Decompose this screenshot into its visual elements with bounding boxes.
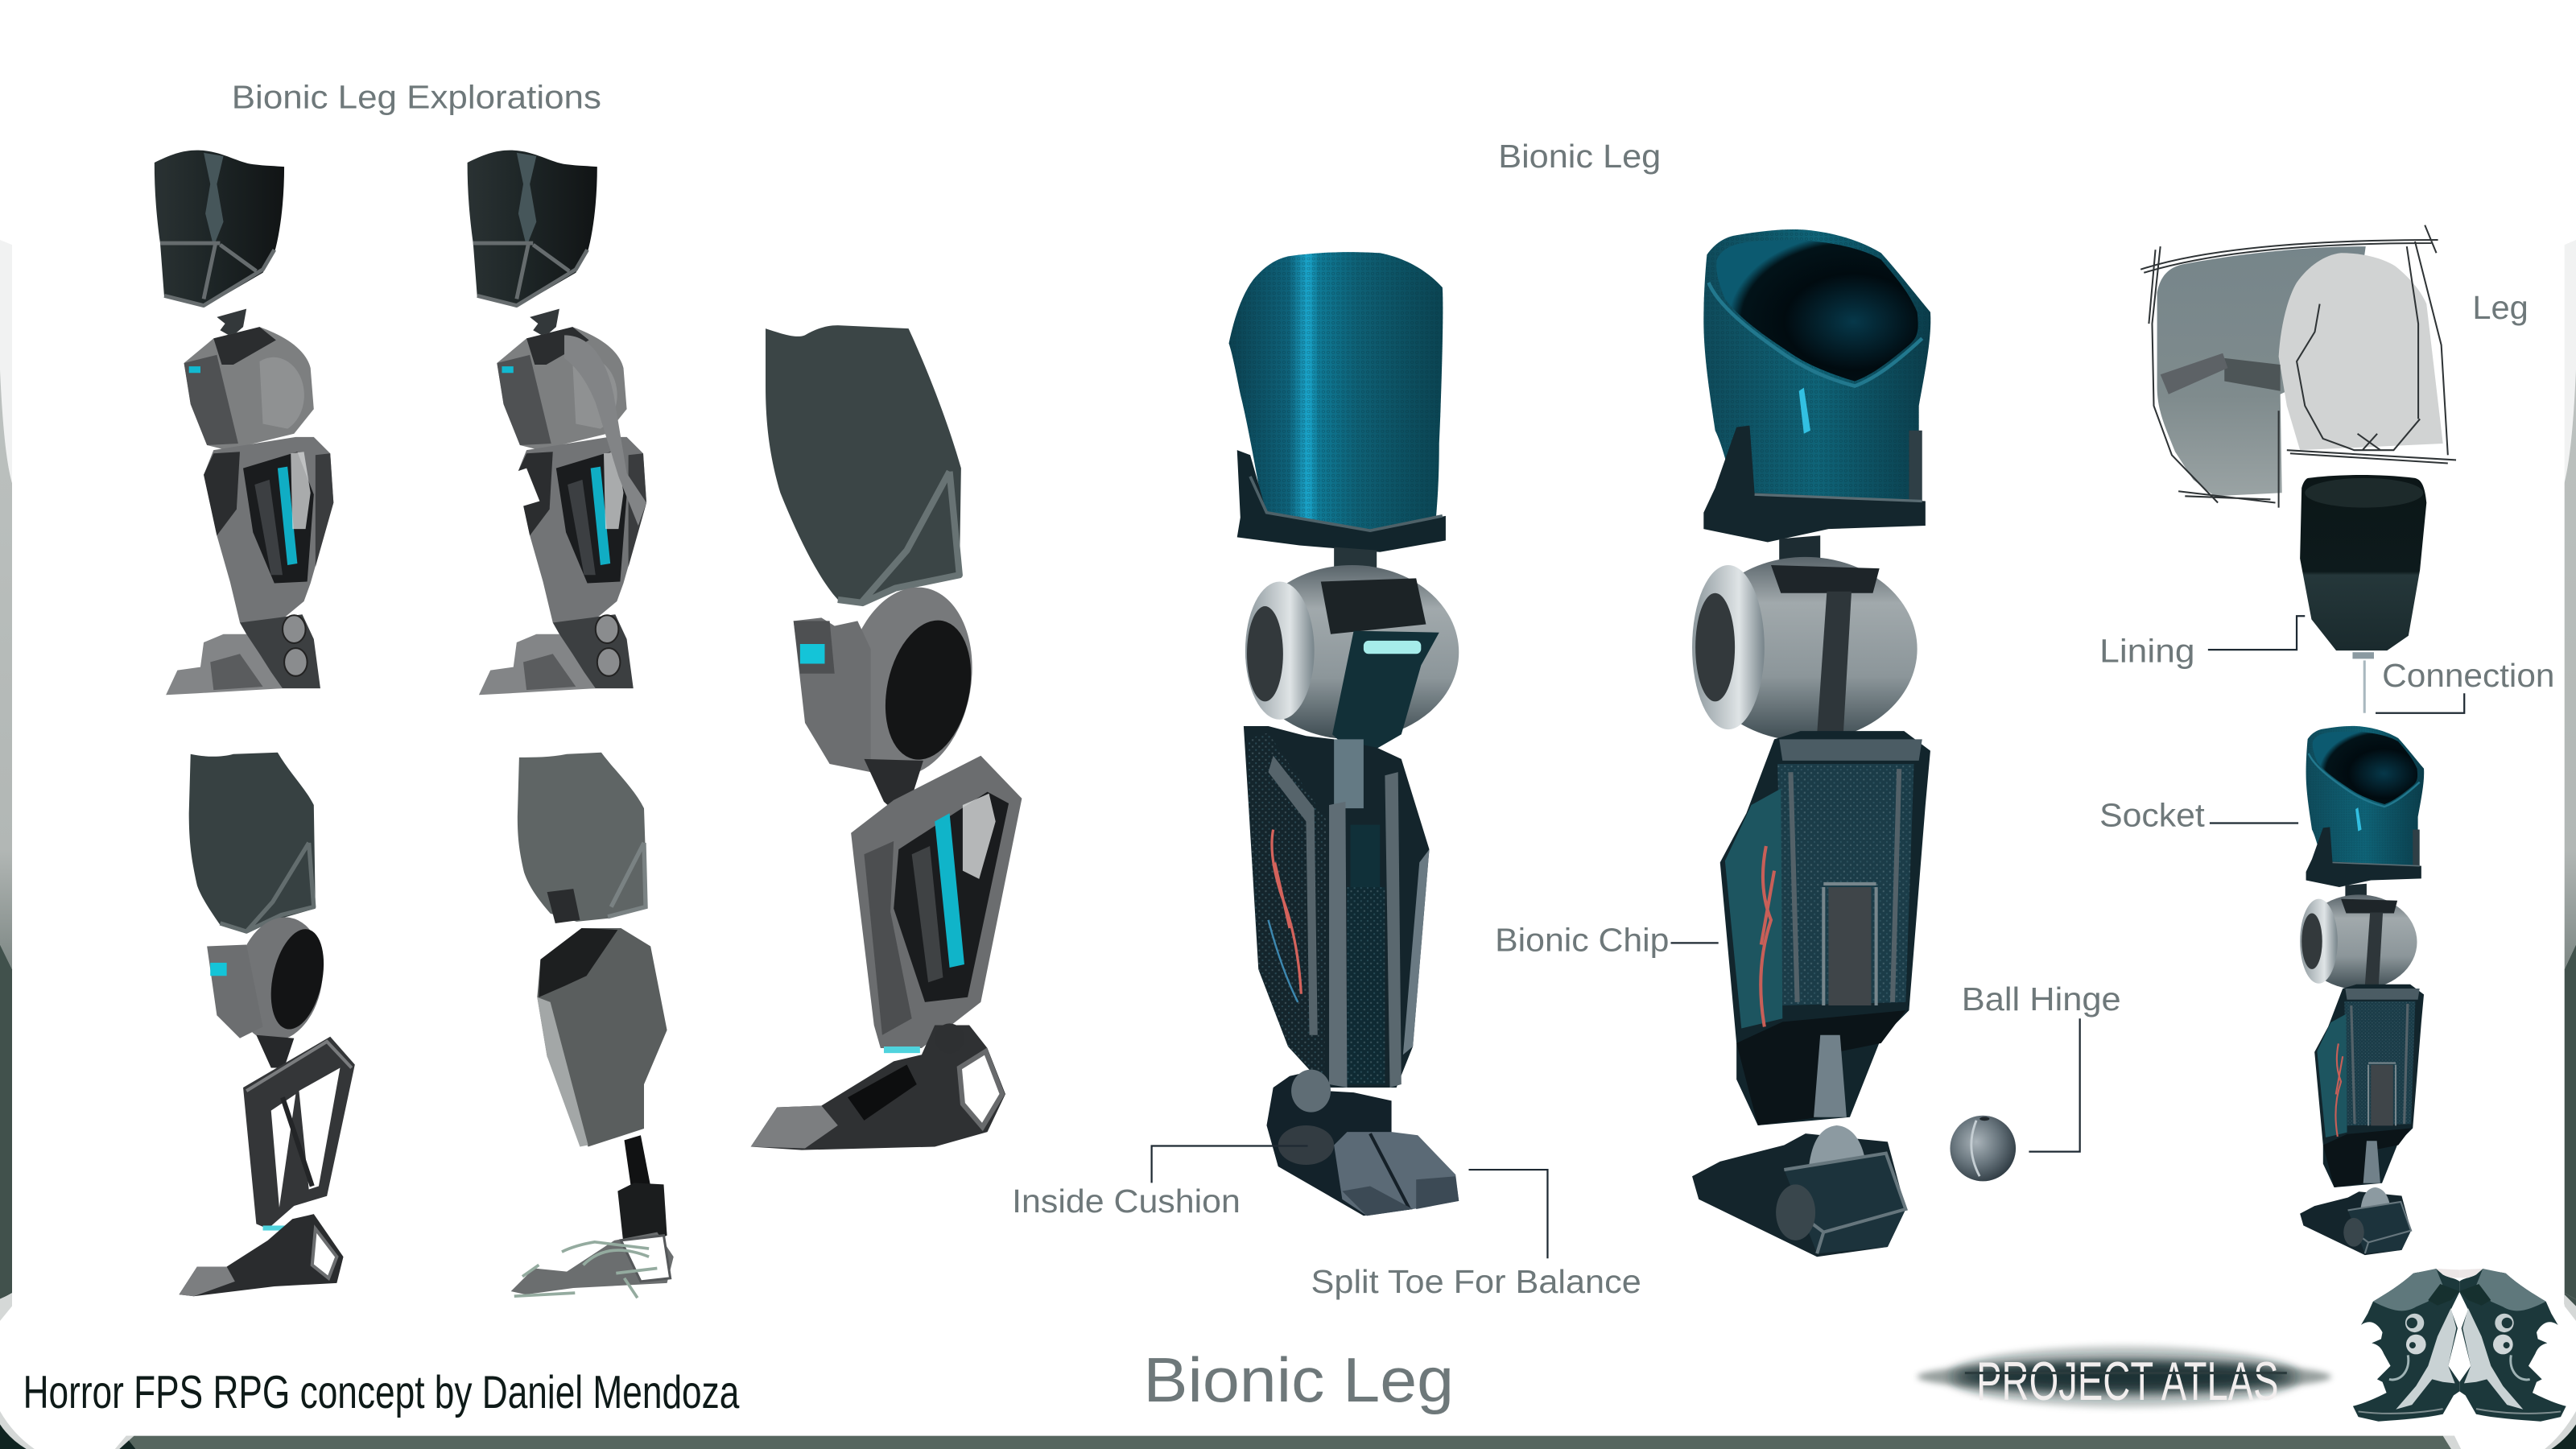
label: Lining with leader: Lining bbox=[2099, 632, 2195, 669]
socket bracket bbox=[220, 843, 314, 931]
label: Inside Cushion with leader: Inside Cushion bbox=[1012, 1183, 1241, 1220]
front limb bbox=[2279, 253, 2443, 450]
shin bbox=[204, 437, 333, 626]
socket bbox=[1229, 252, 1443, 539]
center slot bbox=[1828, 887, 1871, 1005]
emblem left half bbox=[2353, 1269, 2459, 1422]
socket bracket bbox=[838, 472, 960, 603]
credit line: Horror FPS RPG concept by Daniel Mendoza bbox=[23, 1367, 740, 1418]
socket bbox=[1703, 229, 1930, 502]
label: Split Toe For Balance with leader: Split Toe For Balance bbox=[1311, 1263, 1641, 1300]
label: Inside Cushion with leader bbox=[1012, 1146, 1307, 1220]
armored shin bbox=[537, 928, 667, 1146]
logo: Project Atlas wordmark: PROJECT ATLAS bbox=[1976, 1352, 2279, 1412]
main leg: front view bbox=[1229, 252, 1459, 1216]
foot bbox=[751, 1025, 1005, 1150]
foot bbox=[1266, 1071, 1413, 1216]
foot bbox=[179, 1214, 344, 1296]
post bbox=[1334, 547, 1377, 570]
heading: Bionic Leg Explorations: Bionic Leg Explorations bbox=[232, 79, 601, 116]
label: Connection with leader: Connection bbox=[2382, 657, 2554, 694]
lower shin struts bbox=[1790, 769, 1899, 1002]
circuit wires bbox=[1761, 846, 1774, 1027]
label: Ball Hinge with leader bbox=[1962, 980, 2121, 1152]
knee bbox=[184, 327, 314, 450]
title: Bionic Leg: Bionic Leg bbox=[1143, 1346, 1454, 1415]
socket bracket bbox=[1703, 426, 1926, 542]
logo: Project Atlas wordmark bbox=[1918, 1345, 2331, 1412]
ball joint bbox=[1694, 557, 1918, 741]
knee front panel bbox=[794, 617, 871, 772]
post bbox=[1779, 535, 1820, 562]
gap in shin bbox=[507, 469, 539, 506]
shin armor strips bbox=[1269, 756, 1318, 1035]
circuit wires bbox=[1272, 830, 1301, 994]
exploration leg 5 bbox=[511, 753, 674, 1298]
exploration leg 3: large side view bbox=[751, 325, 1022, 1150]
logo: Atlas emblem bbox=[2353, 1269, 2566, 1422]
main leg: rear three-quarter view bbox=[1692, 229, 1930, 1257]
sketch outline bbox=[2140, 225, 2456, 508]
socket bbox=[155, 151, 284, 308]
teal front panel bbox=[1332, 631, 1439, 759]
ball joint bbox=[1245, 565, 1459, 739]
small assembled leg bbox=[2300, 726, 2424, 1255]
rear limb shading bbox=[2157, 246, 2366, 496]
neck bbox=[217, 309, 246, 336]
frame: left edge strip bbox=[0, 240, 12, 1299]
foot sketch lines bbox=[514, 1242, 657, 1298]
frame: right edge strip bbox=[2565, 240, 2576, 1299]
knee disc bbox=[831, 577, 986, 786]
chip panel bbox=[1725, 789, 1782, 1029]
exploded view: lining bbox=[2300, 475, 2426, 713]
strap and buckle bbox=[2224, 358, 2281, 391]
frame: bottom strip bbox=[128, 1436, 2443, 1449]
socket bbox=[518, 753, 647, 922]
exploration leg 2 bbox=[468, 151, 646, 695]
open shin frame bbox=[243, 1037, 355, 1229]
ball hinge bbox=[1950, 1116, 2016, 1181]
emblem right half bbox=[2459, 1269, 2566, 1422]
frame: bottom-right corner bbox=[2440, 1293, 2576, 1449]
split toes bbox=[1334, 1132, 1459, 1216]
connection stem bbox=[2352, 652, 2374, 658]
foot bbox=[240, 614, 320, 688]
strut bbox=[625, 1135, 650, 1186]
socket opening bbox=[1716, 240, 1918, 381]
foot bbox=[1692, 1133, 1905, 1257]
label: Lining with leader bbox=[2099, 616, 2305, 669]
socket bracket bbox=[608, 843, 646, 917]
exploded view: sketched residual limb bbox=[2140, 225, 2456, 508]
neck bbox=[864, 759, 923, 816]
label: Leg: Leg bbox=[2472, 289, 2529, 326]
exploration leg 4 bbox=[179, 753, 355, 1296]
dark top panel bbox=[1321, 578, 1426, 634]
shin bbox=[1720, 731, 1930, 1125]
shoulder armor overlay bbox=[564, 335, 646, 526]
label: Ball Hinge with leader: Ball Hinge bbox=[1962, 980, 2121, 1018]
knee bbox=[226, 910, 332, 1048]
socket bbox=[189, 753, 316, 933]
label: Socket with leader: Socket bbox=[2099, 797, 2205, 834]
foot bbox=[511, 1232, 674, 1294]
ankle bbox=[617, 1183, 667, 1252]
label: Bionic Chip with leader: Bionic Chip bbox=[1495, 922, 1669, 959]
socket bracket bbox=[1237, 450, 1446, 552]
socket bbox=[766, 325, 961, 605]
heading: Bionic Leg: Bionic Leg bbox=[1498, 138, 1661, 175]
label: Split Toe For Balance with leader bbox=[1311, 1170, 1641, 1300]
shin bbox=[1244, 726, 1430, 1088]
shin bbox=[851, 756, 1022, 1048]
frame: bottom-left corner bbox=[0, 1294, 135, 1449]
label: Connection with leader bbox=[2376, 657, 2554, 713]
exploration leg 1 bbox=[155, 151, 333, 695]
